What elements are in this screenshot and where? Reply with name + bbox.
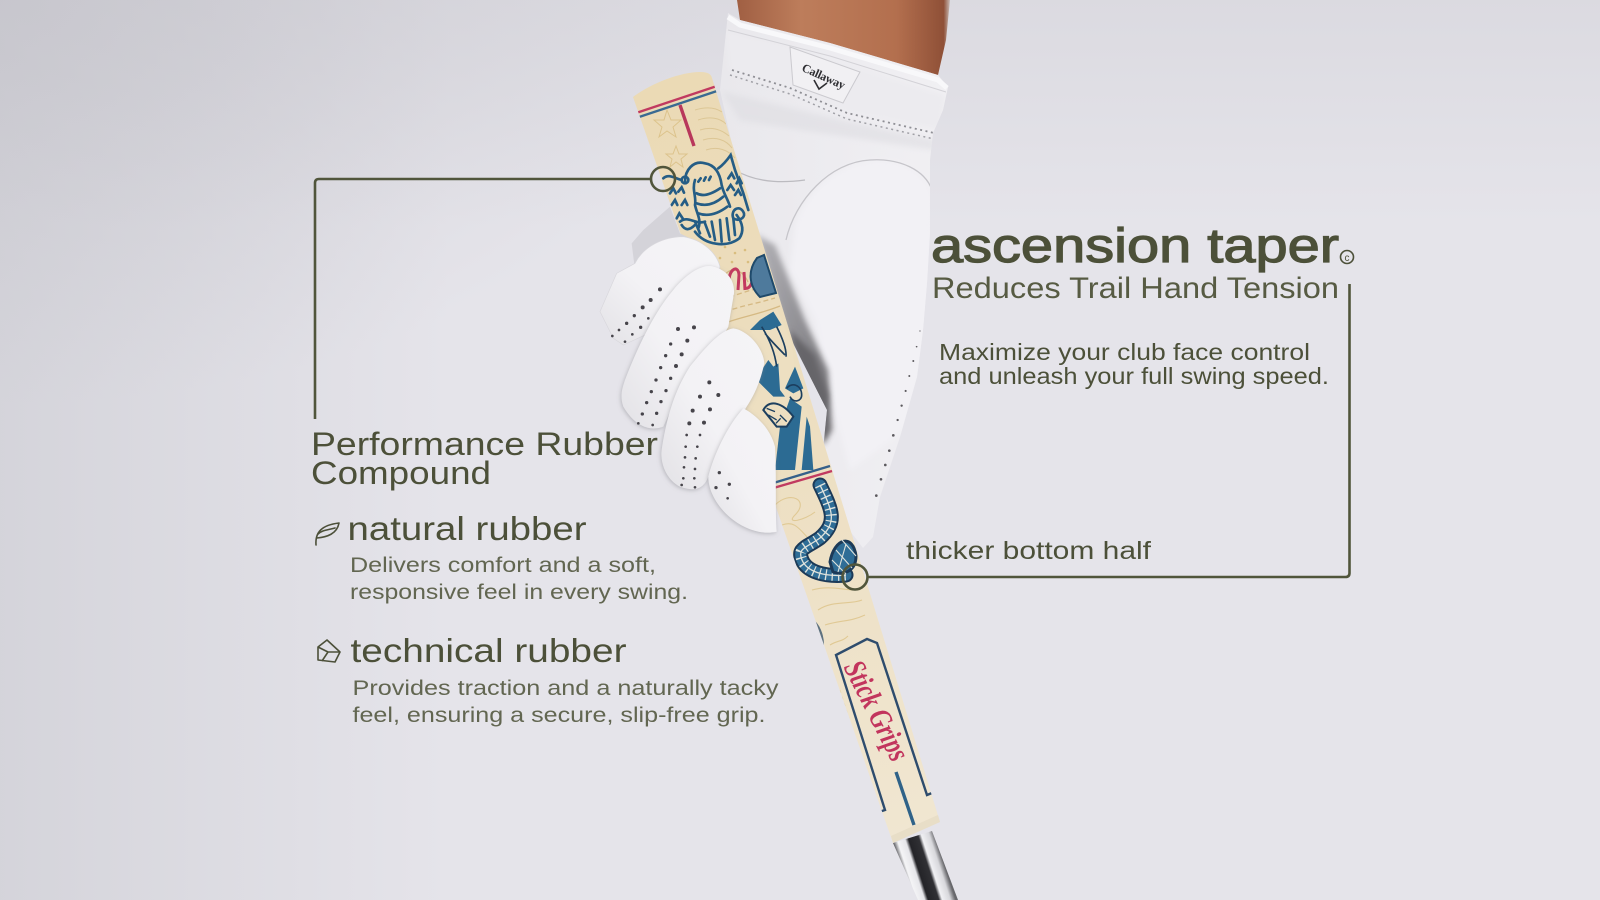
- title: ascension taper: [931, 220, 1339, 273]
- finger A fold: [632, 207, 707, 270]
- arm: [737, 0, 950, 75]
- item description: [350, 553, 688, 604]
- photo: gloved hand holding golf grip: [600, 0, 958, 900]
- ornament: [751, 255, 776, 297]
- copyright mark: c: [1344, 253, 1350, 264]
- shaft: [893, 831, 958, 900]
- item description: Provides traction and a naturally tacky: [352, 676, 779, 700]
- grip logotype: Stick Grips: [837, 654, 917, 766]
- contour lines: [695, 108, 735, 158]
- cuff shading: [725, 30, 945, 130]
- blue figure panel: [750, 312, 814, 470]
- dashed script lines: [722, 270, 780, 322]
- thumb crease: [757, 235, 832, 445]
- item description: [352, 676, 779, 727]
- brand label: [790, 47, 860, 103]
- right text block: ascension taper: [906, 220, 1354, 565]
- logo panel outline: [836, 639, 932, 813]
- finger perforations: [611, 287, 731, 500]
- top stripes: [638, 86, 715, 114]
- palm perforations: [875, 330, 921, 497]
- subtitle: Reduces Trail Hand Tension: [932, 272, 1339, 305]
- finger B: [622, 266, 734, 428]
- thumb pad: [790, 160, 932, 470]
- cuff stitching: [732, 70, 934, 133]
- item description: responsive feel in every swing.: [350, 580, 688, 604]
- grip: [630, 72, 940, 843]
- copyright mark: [1340, 250, 1354, 264]
- description: Maximize your club face control: [939, 339, 1310, 365]
- cuff rim: [728, 17, 947, 88]
- callout leader: thicker bottom half: [842, 284, 1350, 590]
- glove palm and cuff: [720, 13, 948, 548]
- description: [939, 339, 1329, 389]
- snake illustration: [801, 485, 856, 645]
- brand label: Callaway: [800, 61, 847, 92]
- icon: leaf: [316, 523, 339, 545]
- heading: Performance Rubber: [311, 426, 658, 462]
- technical rubber item: [318, 632, 779, 727]
- item description: Delivers comfort and a soft,: [350, 553, 656, 577]
- heading: [311, 426, 658, 491]
- eagle: [663, 155, 748, 244]
- dots below eagle: [719, 246, 749, 263]
- finger C: [661, 328, 764, 489]
- callout leader: performance rubber compound: [315, 167, 675, 419]
- item description: feel, ensuring a secure, slip-free grip.: [352, 703, 766, 727]
- lower stripes: [770, 466, 830, 484]
- grip end shade: [891, 815, 940, 843]
- script monogram: [729, 269, 752, 290]
- icon: cube: [318, 640, 340, 662]
- left text block: performance rubber compound: [311, 426, 779, 727]
- stars: [654, 110, 681, 137]
- script flourishes: [776, 497, 866, 712]
- item title: natural rubber: [348, 510, 587, 547]
- finger D: [708, 408, 777, 533]
- finger A knuckle: [600, 237, 720, 345]
- heading: Compound: [311, 455, 491, 491]
- item title: technical rubber: [350, 632, 627, 669]
- callout label: thicker bottom half: [906, 537, 1151, 565]
- fingers: [600, 207, 777, 533]
- blue bar: [896, 772, 914, 825]
- description: and unleash your full swing speed.: [939, 363, 1329, 389]
- natural rubber item: [316, 510, 688, 604]
